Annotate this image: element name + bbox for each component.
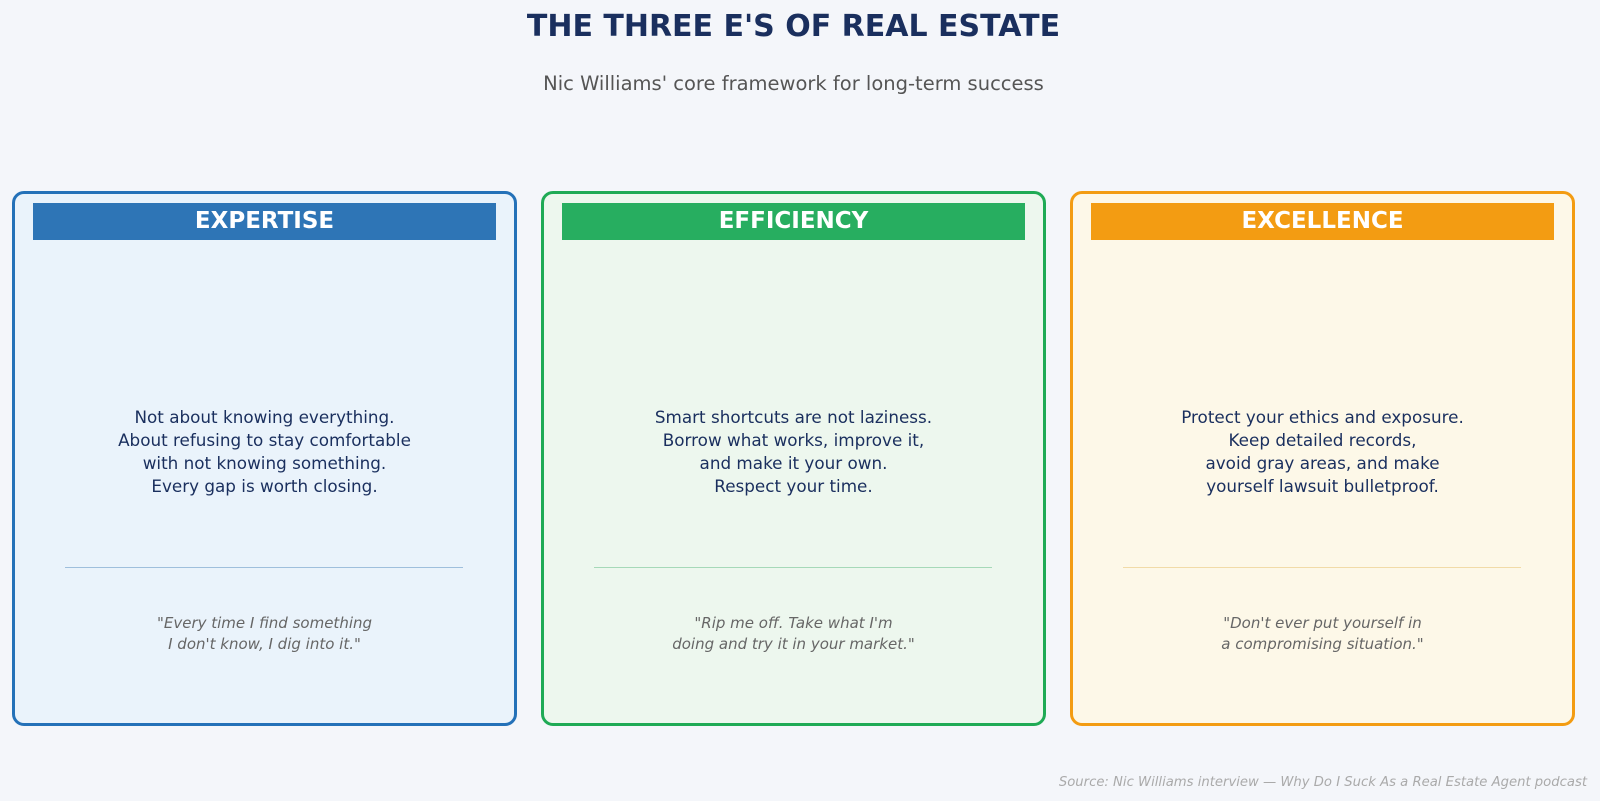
text: excellence	[1181, 407, 1464, 496]
subtitle: Nic Williams' core framework for long-term success	[543, 72, 1044, 95]
panel: expertise	[12, 191, 517, 726]
text: efficiency: Smart shortcuts are not laziness.	[655, 407, 932, 427]
text: expertise: Not about knowing everything.	[134, 407, 395, 427]
header: expertise	[33, 203, 496, 240]
text: excellence: Protect your ethics and exposure.	[1181, 407, 1464, 427]
text: excellence: avoid gray areas, and make	[1205, 453, 1440, 473]
text: expertise: Every gap is worth closing.	[151, 476, 378, 496]
panel: excellence	[1070, 191, 1575, 726]
quote: efficiency: doing and try it in your market."	[672, 635, 915, 653]
text: efficiency: Respect your time.	[714, 476, 873, 496]
text: excellence: Keep detailed records,	[1229, 430, 1416, 450]
text: efficiency	[655, 407, 932, 496]
text: expertise: with not knowing something.	[143, 453, 386, 473]
text: expertise: About refusing to stay comfortable	[118, 430, 411, 450]
quote: excellence: "Don't ever put yourself in	[1223, 614, 1422, 632]
quote: excellence	[1221, 614, 1424, 653]
quote: expertise: "Every time I find something	[157, 614, 372, 632]
header: efficiency	[562, 203, 1025, 240]
quote: expertise	[157, 614, 372, 653]
text: efficiency: Borrow what works, improve it,	[663, 430, 924, 450]
quote: expertise: I don't know, I dig into it."	[168, 635, 361, 653]
header: expertise: EXPERTISE	[195, 208, 334, 234]
text: expertise	[118, 407, 411, 496]
quote: efficiency: "Rip me off. Take what I'm	[694, 614, 893, 632]
panel: efficiency	[541, 191, 1046, 726]
header: efficiency: EFFICIENCY	[719, 208, 868, 234]
source: Source: Nic Williams interview — Why Do I Suck As a Real Estate Agent podcast	[1059, 775, 1587, 790]
quote: efficiency	[672, 614, 915, 653]
title: THE THREE E'S OF REAL ESTATE	[527, 9, 1060, 44]
header: excellence	[1091, 203, 1554, 240]
quote: excellence: a compromising situation."	[1221, 635, 1424, 653]
text: efficiency: and make it your own.	[700, 453, 887, 473]
header: excellence: EXCELLENCE	[1241, 208, 1404, 234]
text: excellence: yourself lawsuit bulletproof.	[1206, 476, 1439, 496]
